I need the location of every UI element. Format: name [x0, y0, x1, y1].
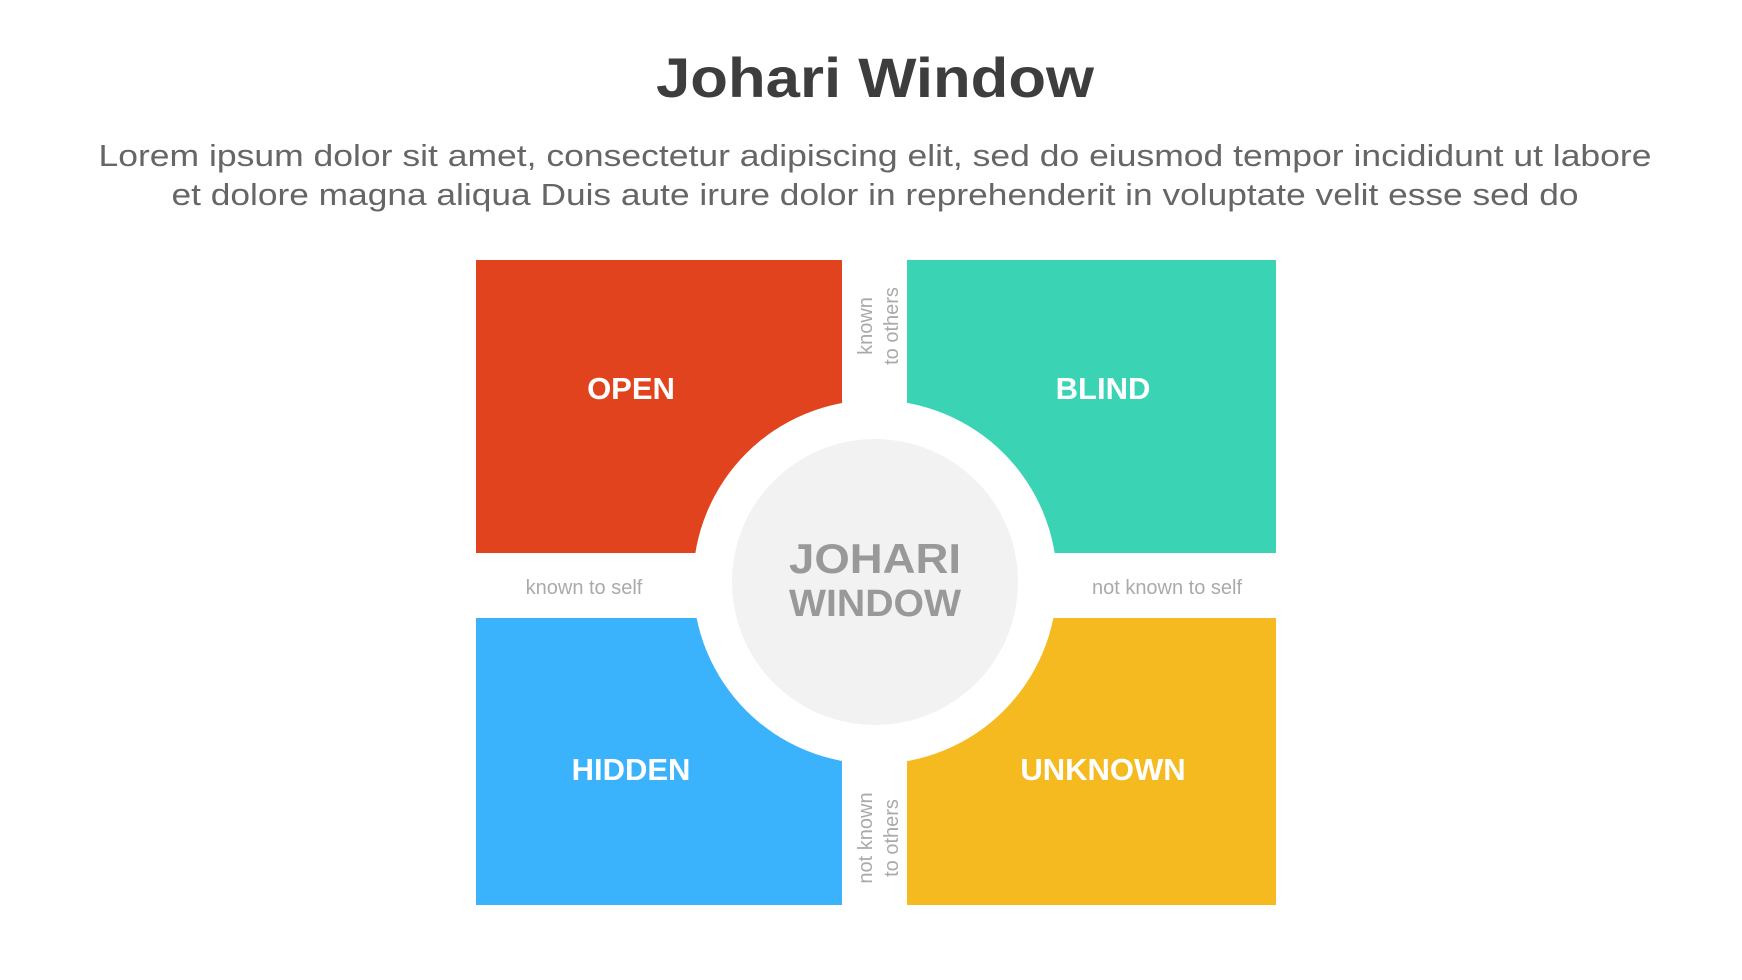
panel: blind: BLIND: [1056, 371, 1150, 406]
panel: unknown: UNKNOWN: [1020, 752, 1186, 787]
subtitle text: [98, 138, 1652, 212]
panel: blind: [907, 260, 1276, 553]
panel: open: OPEN: [587, 371, 675, 406]
panel: hidden: [476, 618, 842, 905]
subtitle text: et dolore magna aliqua Duis aute irure dolor in reprehenderit in voluptate velit esse sed do: [172, 177, 1579, 212]
label: known to others: to others: [881, 287, 903, 365]
center circle: JOHARI: [789, 535, 961, 582]
subtitle text: Lorem ipsum dolor sit amet, consectetur adipiscing elit, sed do eiusmod tempor incididunt ut labore: [98, 138, 1652, 173]
center circle: [693, 400, 1057, 764]
panel: open: [476, 260, 842, 553]
panel: hidden: HIDDEN: [572, 752, 690, 787]
label: known to self: known to self: [526, 577, 643, 599]
title: Johari Window: [656, 46, 1094, 109]
center circle: WINDOW: [789, 583, 961, 625]
label: not known to others: [855, 792, 903, 884]
label: known to others: [855, 287, 903, 365]
label: known to others: known: [855, 297, 877, 355]
label: not known to others: to others: [881, 799, 903, 877]
panel: unknown: [907, 618, 1276, 905]
label: not known to self: not known to self: [1092, 577, 1242, 599]
label: not known to others: not known: [855, 792, 877, 884]
